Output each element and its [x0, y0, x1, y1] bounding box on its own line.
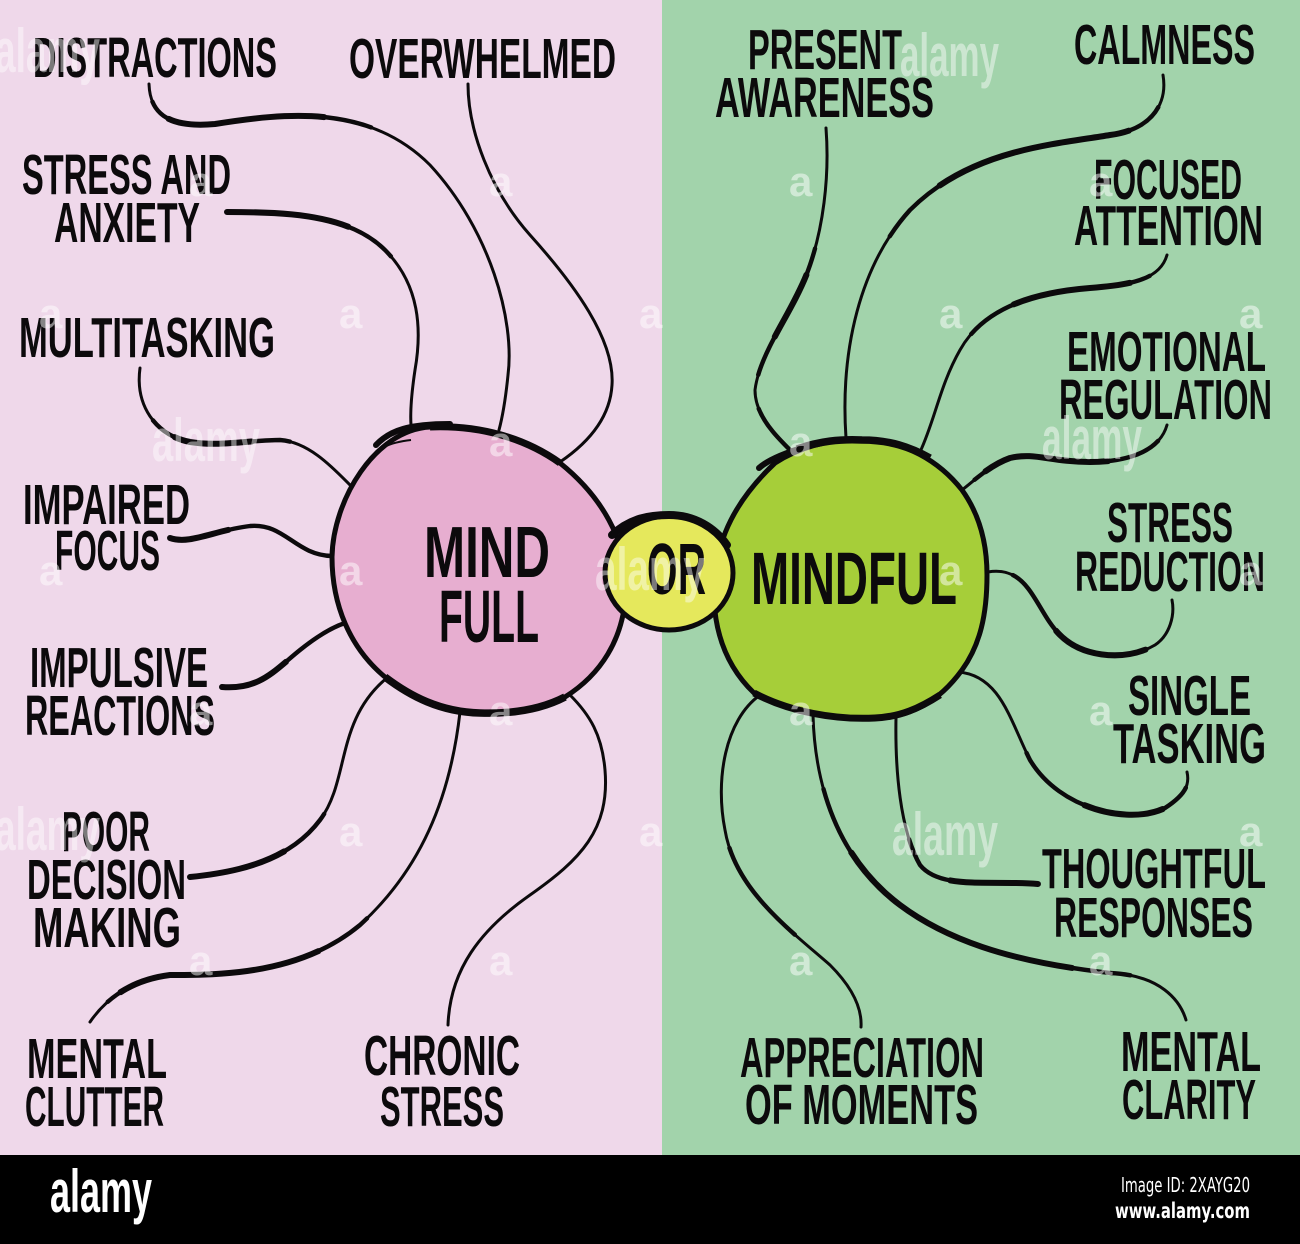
label: mental clutter: CLUTTER	[25, 1075, 164, 1139]
watermarks: a	[489, 418, 513, 465]
circle: mindful	[714, 440, 987, 718]
watermarks: a	[639, 290, 663, 337]
panel: mind full connectors	[90, 84, 612, 1025]
heading: or: OR	[647, 530, 706, 610]
heading: mind full: MIND	[424, 513, 550, 593]
label: stress and anxiety: ANXIETY	[54, 191, 200, 255]
watermarks: a	[489, 158, 513, 205]
watermarks: a	[789, 937, 813, 984]
watermarks: a	[939, 547, 963, 594]
watermarks: alamy	[900, 22, 999, 89]
watermarks: alamy	[595, 536, 705, 603]
watermarks: a	[339, 290, 363, 337]
label: thoughtful responses	[1042, 837, 1266, 950]
watermarks: a	[489, 937, 513, 984]
watermarks: a	[939, 290, 963, 337]
footer bar	[0, 1155, 1300, 1244]
watermarks: alamy	[1042, 405, 1142, 472]
label: emotional regulation	[1059, 320, 1272, 432]
watermarks: a	[1239, 547, 1263, 594]
panel: mindful connectors	[721, 75, 1188, 1027]
panel: mind full background	[0, 0, 662, 1155]
watermarks: a	[1089, 937, 1113, 984]
watermarks: a	[339, 808, 363, 855]
label: present awareness	[715, 18, 934, 130]
label: impaired focus: IMPAIRED	[23, 473, 190, 537]
watermarks: a	[1089, 687, 1113, 734]
watermarks: a	[789, 158, 813, 205]
label: stress and anxiety	[22, 143, 231, 255]
label: mental clutter: MENTAL	[27, 1027, 167, 1091]
label: impaired focus	[23, 473, 190, 583]
label: appreciation of moments: OF MOMENTS	[745, 1073, 978, 1137]
watermarks: alamy	[892, 801, 998, 868]
heading: mindful: MINDFUL	[751, 537, 957, 620]
label: appreciation of moments	[740, 1026, 984, 1137]
watermarks: a	[189, 937, 213, 984]
circle: or connector	[605, 515, 733, 630]
watermarks: a	[39, 290, 63, 337]
watermarks	[0, 17, 1263, 984]
label: overwhelmed: OVERWHELMED	[349, 27, 616, 91]
label: impulsive reactions: REACTIONS	[25, 684, 215, 748]
label: poor decision making: MAKING	[33, 896, 181, 960]
label: chronic stress	[364, 1024, 520, 1139]
label: single tasking	[1113, 664, 1266, 776]
label: poor decision making: DECISION	[27, 848, 186, 912]
label: distractions: DISTRACTIONS	[33, 26, 277, 90]
watermarks: a	[789, 687, 813, 734]
watermarks: a	[639, 808, 663, 855]
label: chronic stress: CHRONIC	[364, 1024, 520, 1088]
heading: mind full	[424, 513, 550, 658]
watermarks: a	[1089, 158, 1113, 205]
watermarks: a	[789, 418, 813, 465]
label: stress and anxiety: STRESS AND	[22, 143, 231, 207]
circle: mind full	[332, 424, 626, 713]
watermarks: alamy	[0, 17, 100, 86]
watermarks: a	[39, 547, 63, 594]
label: present awareness: PRESENT	[748, 18, 902, 82]
label: focused attention	[1074, 148, 1263, 258]
label: impulsive reactions	[25, 636, 215, 748]
watermarks: a	[189, 687, 213, 734]
label: mental clarity	[1121, 1020, 1261, 1132]
label: stress reduction	[1075, 491, 1265, 604]
heading: mind full: FULL	[439, 575, 539, 658]
label: poor decision making: POOR	[62, 800, 150, 864]
label: poor decision making	[27, 800, 186, 960]
label: appreciation of moments: APPRECIATION	[740, 1026, 984, 1090]
watermarks: alamy	[152, 407, 260, 474]
footer logo: alamy: alamy	[50, 1158, 152, 1225]
watermarks: a	[489, 687, 513, 734]
label: impulsive reactions: IMPULSIVE	[30, 636, 208, 700]
label: mental clutter	[25, 1027, 167, 1139]
watermarks: a	[339, 547, 363, 594]
watermarks: a	[189, 158, 213, 205]
watermarks: a	[1239, 808, 1263, 855]
label: chronic stress: STRESS	[380, 1075, 504, 1139]
label: multitasking: MULTITASKING	[19, 306, 275, 370]
watermarks: alamy	[0, 796, 100, 863]
panel: mindful background	[662, 0, 1300, 1155]
label: impaired focus: FOCUS	[55, 519, 160, 583]
label: present awareness: AWARENESS	[715, 66, 934, 130]
watermarks: a	[1239, 290, 1263, 337]
